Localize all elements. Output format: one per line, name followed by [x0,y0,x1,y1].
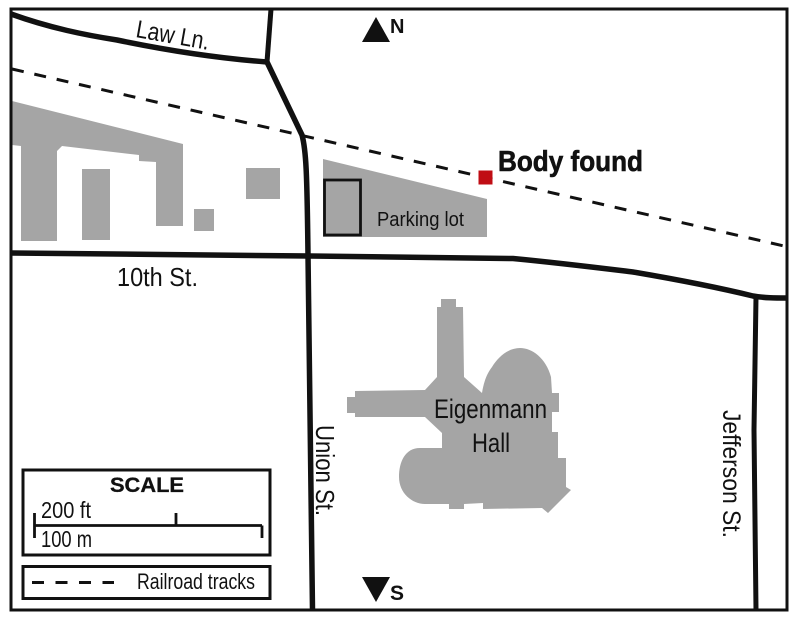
label: Eigenmann Hall: Hall [472,428,510,458]
road: Jefferson St. [754,297,756,610]
scale box [23,470,270,555]
north arrow: N [390,16,404,38]
north arrow [362,16,404,42]
label: Body found: Body found [498,146,643,178]
legend label: Railroad tracks [137,569,255,594]
south arrow: S [390,582,404,605]
scale bar [34,513,262,538]
building: west block [82,169,110,240]
scale: metres label: 100 m [41,526,92,552]
scale heading: SCALE [110,474,184,497]
south arrow [362,577,404,605]
building: small square [194,209,214,231]
road: 10th St. [11,253,787,298]
building: northeast square [246,168,280,199]
parking lot area [323,159,487,237]
marker: body found [478,170,492,184]
legend dashes [32,581,114,584]
label: 10th St.: 10th St. [117,262,198,292]
building: Eigenmann Hall [347,299,571,513]
road: Union St. [267,62,312,610]
road: north connector [267,9,271,62]
railroad tracks [12,69,784,246]
label: Jefferson St.: Jefferson St. [717,410,745,538]
label: Union St.: Union St. [310,425,340,516]
parking structure outline [324,180,360,235]
scale: feet label: 200 ft [41,497,92,523]
legend box [23,566,270,598]
label: Eigenmann Hall [434,394,547,458]
label: Law Ln.: Law Ln. [134,15,212,56]
label: Eigenmann Hall: Eigenmann [434,394,547,424]
parking lot label: Parking lot [377,209,464,231]
road: Law Ln. [11,14,267,62]
building: west complex [12,101,183,241]
